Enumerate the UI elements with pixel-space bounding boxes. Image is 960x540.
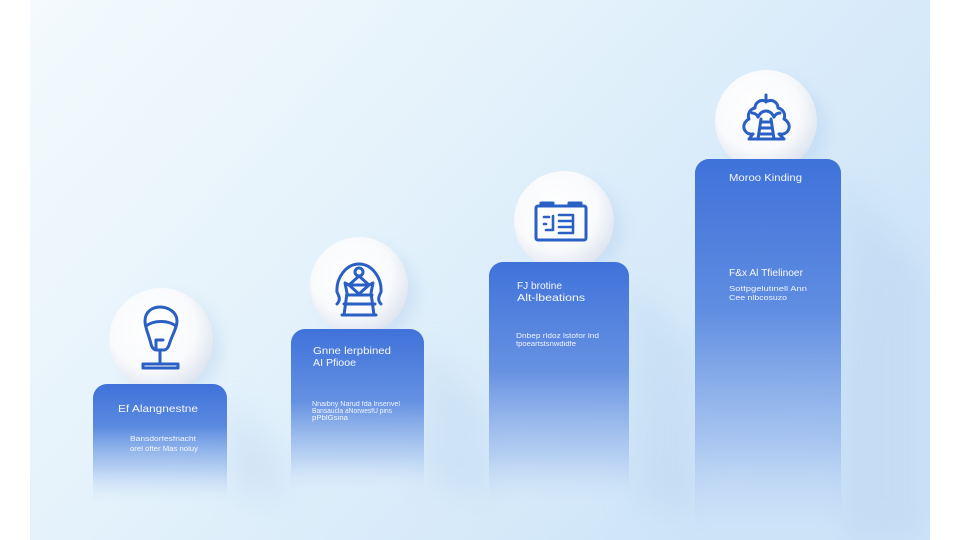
ball shadow 4 [730,81,826,177]
description 1: orel ofter Mas noluy [130,446,199,453]
ball 3 [514,171,614,271]
step 2: Combined AI [291,237,424,490]
subheading 4: F&x Al Tfielinoer [729,267,803,279]
description 2: Nnaibny Narud fda lnsenvel [312,401,400,408]
icon: trophy lamp [143,307,178,368]
ball shadow 3 [529,182,623,276]
ball shadow 1 [123,299,221,397]
bar 1 [93,384,227,510]
step 4: Model training [695,70,841,535]
heading 2: Gnne lerpbined [313,345,391,357]
heading 3: FJ brotine [517,280,562,292]
description 4: Sotfpgelutinell Ann [729,286,807,293]
description 4 [729,286,807,302]
heading 2 [313,345,391,369]
icon: bell frame [337,264,381,315]
description 1: Bansdorfesfnacht [130,436,196,443]
description 3: fpoeartstsnwdidfe [516,341,576,348]
heading 2: AI Pfiooe [313,357,356,369]
description 3: Dnbep rldoz lstofor lnd [516,333,599,340]
ball shadow 2 [324,248,416,340]
diagonal bar shadows [230,218,910,522]
description 1 [130,436,199,453]
bar 4 [695,159,841,535]
ball 2 [310,237,408,335]
description 4: Cee nlbcosuzo [729,295,787,302]
heading 1: Ef Alangnestne [118,403,198,415]
step 3: AI applications [489,171,629,505]
description 2: pPblGsina [312,415,348,422]
bar 3 [489,262,629,505]
heading 3 [517,280,585,304]
heading 4: Moroo Kinding [729,172,802,184]
step 1: Alignment [93,288,227,510]
heading 3: Alt-lbeations [517,292,585,304]
icon: tree brain [744,95,789,139]
icon: circuit board [536,203,586,240]
description 2 [312,401,400,422]
bar 2 [291,329,424,490]
description 3 [516,333,599,348]
ball 1 [109,288,213,392]
description 2: Bansaucla aNorwesfU pins [312,408,392,415]
ball 4 [715,70,817,172]
